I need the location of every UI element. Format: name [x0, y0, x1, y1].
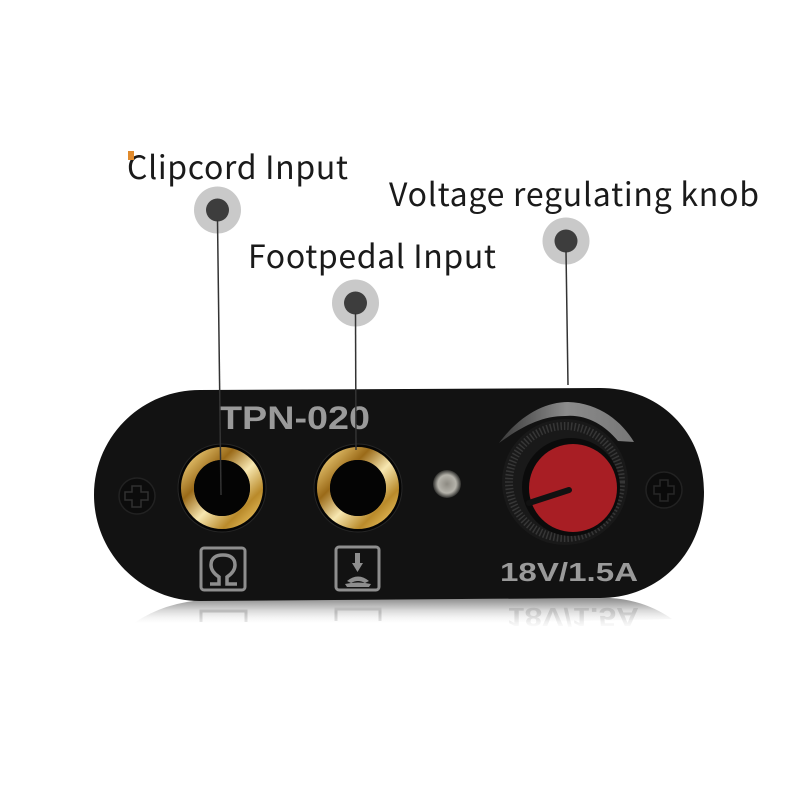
clipcord icon [201, 548, 245, 590]
reflection under device: 18V/1.5A [507, 602, 639, 632]
voltage knob [502, 419, 628, 545]
callout: voltage regulating knob [389, 170, 759, 385]
callout: footpedal input [248, 232, 496, 450]
callout: clipcord input: Clipcord Input [127, 143, 348, 189]
callout: footpedal input: Footpedal Input [248, 232, 496, 278]
right screw [646, 472, 682, 508]
left screw [119, 478, 155, 514]
device panel [94, 388, 704, 601]
callout: clipcord input [127, 143, 348, 495]
rotation arrow arc [499, 402, 634, 443]
rating label: 18V/1.5A [500, 557, 638, 587]
clipcord jack [178, 444, 266, 532]
model label: TPN-020 [219, 400, 370, 436]
footpedal jack [314, 444, 402, 532]
reflection under device [130, 598, 680, 632]
indicator LED [433, 470, 461, 498]
footpedal icon [336, 547, 379, 590]
callout: voltage regulating knob: Voltage regulating knob [389, 170, 759, 216]
